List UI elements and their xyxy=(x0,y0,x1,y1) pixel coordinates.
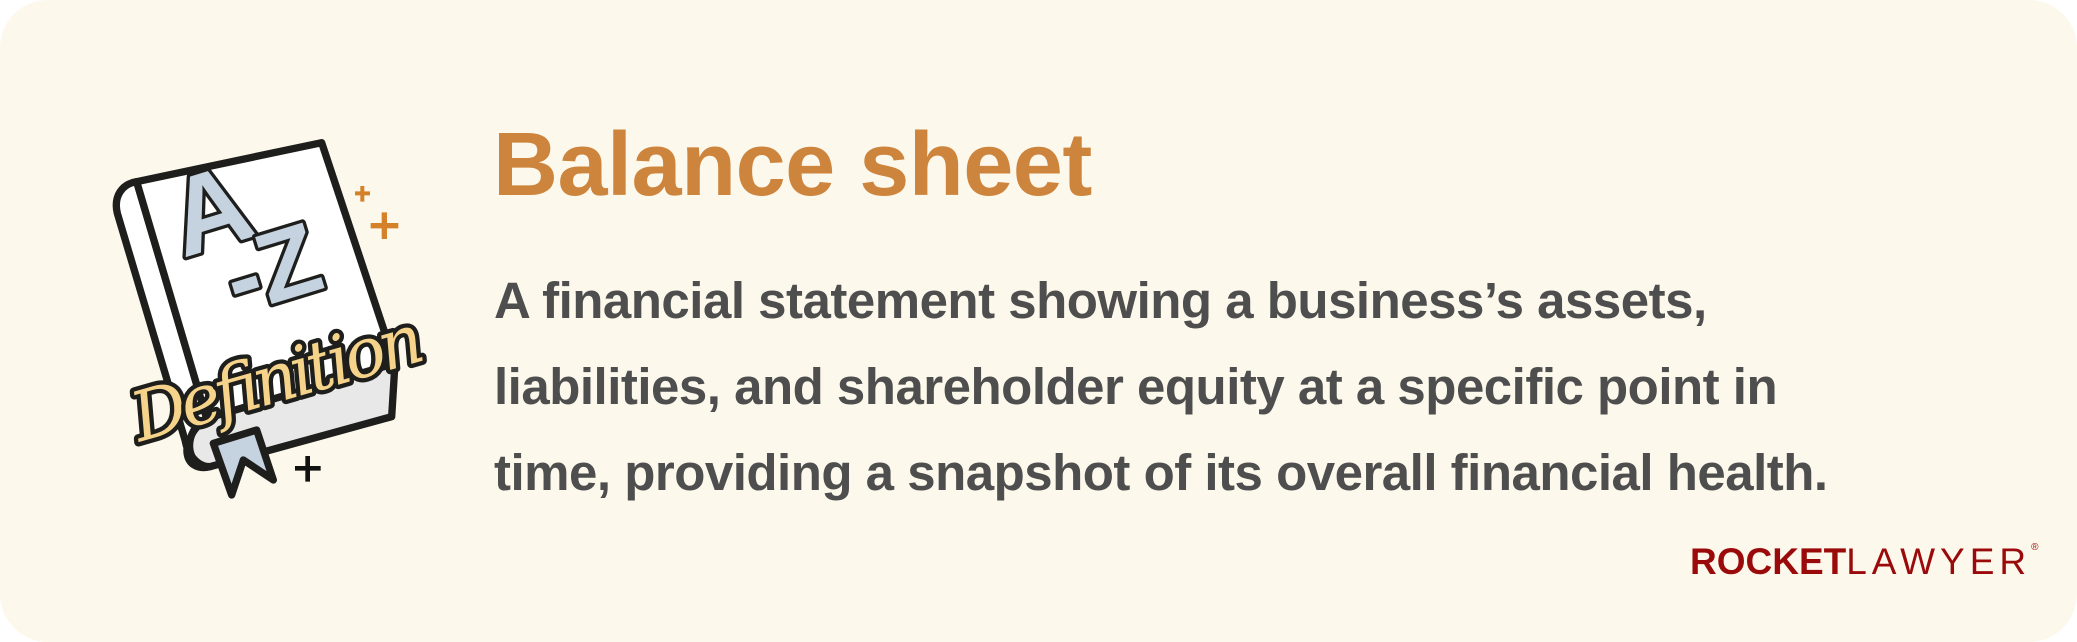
bookmark xyxy=(213,430,273,495)
title: Balance sheet xyxy=(493,115,1092,215)
definition text: A financial statement showing a business’s assets, xyxy=(494,272,1707,329)
spine xyxy=(116,182,210,467)
A-Z letters: -Z xyxy=(211,201,334,336)
icon: A-Z definition book xyxy=(112,139,433,499)
definition text: time, providing a snapshot of its overall financial health. xyxy=(494,444,1828,501)
A-Z letters xyxy=(154,125,334,346)
Definition script: Definition xyxy=(120,300,433,459)
page block xyxy=(187,363,395,468)
definition text xyxy=(494,272,1828,501)
logo: ROCKETLAWYER® xyxy=(1690,541,2038,582)
sparkles xyxy=(355,186,398,239)
A-Z letters: A xyxy=(154,140,266,281)
definition text: liabilities, and shareholder equity at a specific point in xyxy=(494,358,1777,415)
cover xyxy=(137,143,395,418)
